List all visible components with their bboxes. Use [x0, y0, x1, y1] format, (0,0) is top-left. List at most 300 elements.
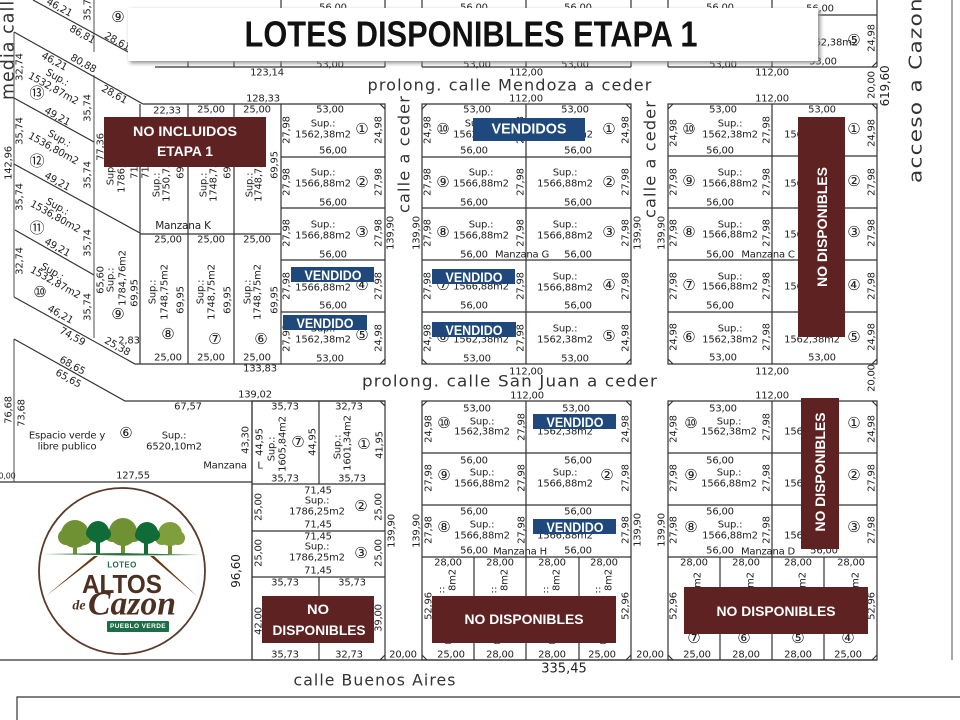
- diagonal lots 10 to 13: Sup.:: [46, 128, 72, 150]
- manzana H: ⑩: [437, 414, 451, 432]
- manzana H: ③: [600, 518, 614, 536]
- manzana K: 71,45: [140, 151, 152, 179]
- lots left of calle a ceder, top block: 56,00: [319, 300, 347, 312]
- manzana K: 69,95: [176, 286, 186, 314]
- manzana C: Manzana C: [741, 250, 795, 260]
- manzana K: ⑨: [111, 305, 125, 323]
- manzana G: 27,98: [516, 219, 526, 247]
- manzana H: ⑩: [441, 630, 455, 648]
- manzana G: ③: [602, 223, 616, 241]
- manzana H: 53,00: [562, 404, 590, 414]
- diagonal lots 10 to 13: ⑫: [29, 152, 45, 170]
- lots left of calle a ceder, top block: 53,00: [316, 60, 344, 70]
- manzana G: ⑧: [436, 223, 450, 241]
- logo: Altos de Cazon: ALTOS: [82, 569, 162, 599]
- manzana C: Sup.:: [718, 272, 742, 282]
- manzana G: ①: [602, 120, 616, 138]
- general dimensions: 20,00: [636, 650, 664, 660]
- manzana D: ④: [841, 629, 855, 647]
- manzana L: 25,00: [374, 493, 384, 521]
- manzana C: ⑩: [682, 120, 696, 138]
- label: vendido lot 3 manzana H: VENDIDO: [546, 519, 604, 535]
- manzana D: 27,98: [762, 464, 772, 492]
- manzana H: 56,00: [564, 506, 592, 518]
- manzana H: 24,98: [620, 415, 632, 443]
- manzana G: ②: [602, 173, 616, 191]
- manzana H: 53,00: [463, 404, 491, 414]
- manzana G: 27,98: [422, 272, 434, 300]
- general dimensions: 112,00: [510, 390, 544, 402]
- manzana G: 1566,88m2: [537, 282, 593, 294]
- manzana K: 25,00: [154, 234, 182, 246]
- manzana C: 56,00: [806, 4, 834, 14]
- manzana D: 28,00: [680, 558, 708, 568]
- manzana G: 1566,88m2: [453, 282, 509, 292]
- manzana H: ①: [600, 414, 614, 432]
- label: no incluidos etapa 1: [104, 117, 266, 167]
- manzana C: ⑥: [682, 328, 696, 346]
- label: vendido lot 4 left block: VENDIDO: [304, 267, 362, 283]
- manzana G: 56,00: [564, 300, 592, 312]
- manzana H: 56,00: [460, 546, 488, 556]
- label: no disponibles manzana L: NO: [307, 601, 329, 617]
- espacio verde: Sup.:: [162, 430, 186, 442]
- manzana G: 56,00: [564, 146, 592, 156]
- manzana K: Sup.:: [242, 280, 254, 304]
- diagonal lots 10 to 13: 32,74: [14, 53, 26, 81]
- manzana G: 27,98: [620, 168, 632, 196]
- general dimensions: 139,90: [656, 216, 668, 250]
- lots left of calle a ceder, top block: 27,98: [374, 272, 384, 300]
- manzana D: 25,00: [683, 650, 711, 660]
- manzana G: 27,98: [620, 272, 632, 300]
- manzana H: ⑦: [596, 630, 610, 648]
- manzana C: Sup.:: [718, 324, 742, 334]
- manzana D: m2: [746, 572, 756, 588]
- diagonal lots 10 to 13: 35,74: [82, 229, 94, 257]
- manzana K: Sup.:: [152, 173, 162, 197]
- general dimensions: 20,00: [866, 71, 878, 99]
- manzana C: Sup.:: [718, 168, 742, 178]
- manzana K: 69,95: [130, 279, 140, 307]
- manzana K: 25,00: [243, 352, 271, 364]
- manzana D: ②: [847, 466, 861, 484]
- manzana C: Sup.:: [718, 118, 742, 130]
- manzana G: 53,00: [561, 60, 589, 70]
- manzana G: 27,98: [620, 219, 632, 247]
- general dimensions: 128,33: [246, 94, 280, 104]
- manzana L: 1601,34m2: [342, 415, 354, 471]
- manzana K: 2,83: [118, 336, 140, 346]
- manzana C: 1562,38m2: [784, 334, 840, 346]
- manzana K: 1750,75m2: [162, 146, 172, 202]
- manzana H: 28,00: [486, 650, 514, 660]
- diagonal lots 10 to 13: 1536,80m2: [26, 131, 80, 167]
- manzana L: 35,73: [271, 402, 299, 412]
- manzana K: 1748,75m2: [254, 146, 264, 202]
- manzana D: 53,00: [709, 404, 737, 414]
- manzana D: ⑦: [687, 629, 701, 647]
- manzana C: 1566,88m2: [702, 178, 758, 190]
- espacio verde: 127,55: [116, 470, 150, 482]
- espacio verde: 73,68: [16, 399, 28, 427]
- manzana C: Sup.:: [718, 220, 742, 230]
- manzana H: 8m2: [604, 569, 614, 591]
- manzana L: 35,73: [271, 578, 299, 588]
- manzana D: ⑧: [684, 518, 698, 536]
- manzana C: 27,98: [762, 219, 772, 247]
- manzana G: 1562,38m2: [537, 334, 593, 346]
- manzana D: Sup.:: [717, 416, 741, 428]
- manzana C: 24,98: [866, 119, 878, 147]
- manzana D: 28,00: [732, 650, 760, 660]
- manzana H: 8m2: [552, 569, 562, 591]
- manzana C: 24,98: [866, 24, 878, 52]
- manzana C: 27,98: [762, 323, 772, 351]
- title: LOTES DISPONIBLES ETAPA 1: [244, 14, 698, 54]
- label: no incluidos etapa 1: NO INCLUIDOS: [133, 123, 237, 139]
- manzana K: 69,95: [270, 286, 280, 314]
- manzana K: ⑧: [161, 325, 175, 343]
- manzana G: 1562,38m2: [537, 130, 593, 140]
- icon: trees: [58, 518, 185, 554]
- manzana K: 25,00: [197, 234, 225, 246]
- manzana H: Manzana H: [493, 546, 547, 558]
- lots left of calle a ceder, top block: 53,00: [316, 104, 344, 116]
- manzana L: ①: [357, 435, 371, 453]
- manzana G: 24,98: [422, 324, 434, 352]
- manzana K: 1786,25m2: [116, 137, 128, 193]
- lots left of calle a ceder, top block: 27,98: [374, 168, 384, 196]
- manzana K: 25,00: [154, 352, 182, 364]
- manzana C: 53,00: [808, 104, 836, 116]
- manzana K: 65,60: [96, 266, 106, 294]
- manzana G: ⑥: [436, 328, 450, 346]
- diagonal lots 10 to 13: 142,96: [4, 146, 14, 180]
- diagonal lots 10 to 13: 35,74: [82, 293, 94, 321]
- manzana L: 25,00: [254, 539, 264, 567]
- manzana G: ⑨: [436, 173, 450, 191]
- diagonal lots 10 to 13: 49,21: [42, 236, 72, 260]
- manzana H: 1566,88m2: [537, 478, 593, 490]
- manzana H: 1562,38m2: [537, 426, 593, 438]
- manzana H: ⑧: [545, 630, 559, 648]
- manzana G: 24,98: [422, 116, 434, 144]
- icon: ground and road: [43, 553, 201, 597]
- lots left of calle a ceder, top block: 24,98: [374, 324, 384, 352]
- manzana C: 24,98: [668, 119, 680, 147]
- diagonal lots 10 to 13: 32,74: [14, 247, 26, 275]
- manzana G: 27,98: [422, 168, 434, 196]
- manzana K: 69,95: [222, 286, 234, 314]
- manzana D: 25,00: [834, 650, 862, 660]
- label: vendidos manzana G: [473, 118, 585, 141]
- diagonal lots 10 to 13: ⑬: [29, 84, 45, 102]
- manzana H: 28,00: [486, 558, 514, 568]
- manzana H: 27,98: [516, 516, 528, 544]
- manzana H: ⑨: [490, 630, 504, 648]
- label: no disponibles manzana C: NO DISPONIBLES: [814, 167, 830, 287]
- manzana C: 1562,38m2: [702, 334, 758, 346]
- lots left of calle a ceder, top block: 1566,88m2: [295, 178, 351, 190]
- manzana L: 35,73: [338, 474, 366, 484]
- manzana L: 71,45: [304, 520, 332, 530]
- lots left of calle a ceder, top block: 27,98: [282, 116, 292, 144]
- manzana H: 27,98: [516, 413, 528, 441]
- manzana L: 39,00: [374, 604, 384, 632]
- general dimensions: 20,00: [389, 650, 417, 660]
- manzana C: 56,00: [706, 2, 734, 14]
- general dimensions: 133,83: [243, 364, 277, 374]
- diagonal lots 10 to 13: 86,81: [67, 23, 97, 47]
- manzana D: 28,00: [784, 650, 812, 660]
- manzana H: Sup.:: [553, 520, 577, 530]
- manzana H: 28,00: [590, 558, 618, 568]
- label: no disponibles manzana L: [262, 596, 374, 643]
- manzana K: 1748,75m2: [252, 264, 264, 320]
- manzana H: 8m2: [448, 569, 458, 591]
- manzana D: 56,00: [706, 456, 734, 466]
- lots left of calle a ceder, top block: 1566,88m2: [295, 282, 351, 294]
- label: no disponibles manzana H: [432, 596, 616, 643]
- manzana K: Sup.:: [148, 280, 158, 304]
- manzana C: 56,00: [706, 198, 734, 208]
- manzana G: 56,00: [564, 2, 592, 14]
- manzana D: 27,98: [668, 464, 680, 492]
- manzana C: 1566,88m2: [702, 230, 758, 240]
- diagonal lots 10 to 13: 35,74: [14, 117, 26, 145]
- manzana K: Sup.:: [106, 161, 116, 185]
- manzana G: ⑤: [602, 327, 616, 345]
- manzana C: 24,98: [668, 323, 680, 351]
- manzana H: ②: [600, 466, 614, 484]
- general dimensions: 335,45: [541, 662, 587, 676]
- diagonal lots 10 to 13: Sup.:: [39, 261, 65, 283]
- manzana H: 1566,88m2: [537, 530, 593, 542]
- manzana G: 24,98: [620, 116, 632, 144]
- manzana C: 56,00: [706, 250, 734, 260]
- lots left of calle a ceder, top block: 1562,38m2: [295, 334, 351, 346]
- manzana D: Manzana D: [741, 546, 796, 558]
- lots left of calle a ceder, top block: Sup.:: [311, 168, 335, 178]
- general dimensions: 139,90: [632, 216, 644, 250]
- manzana H: Sup.:: [553, 416, 577, 428]
- manzana G: 56,00: [460, 146, 488, 156]
- manzana H: 27,98: [620, 516, 632, 544]
- manzana G: Sup.:: [469, 168, 493, 178]
- manzana L: 35,73: [338, 578, 366, 588]
- manzana C: ⑨: [682, 172, 696, 190]
- label: vendido lot 5 left block: VENDIDO: [296, 315, 354, 331]
- espacio verde: 76,68: [4, 396, 14, 424]
- manzana L: 1605,84m2: [278, 416, 288, 472]
- manzana H: 56,00: [460, 506, 488, 518]
- manzana D: 1562,38m2: [701, 426, 757, 438]
- manzana L: Sup.:: [332, 435, 344, 459]
- general dimensions: 139,90: [386, 216, 396, 250]
- manzana D: [668, 401, 878, 660]
- manzana K: 1748,75m2: [160, 264, 170, 320]
- manzana D: m2: [692, 572, 704, 588]
- manzana G: 1566,88m2: [453, 178, 509, 190]
- manzana D: ③: [847, 518, 861, 536]
- manzana C: ⑦: [682, 276, 696, 294]
- manzana K: 71,45: [130, 151, 140, 179]
- logo: Altos de Cazon: de: [72, 598, 86, 614]
- diagonal lots 10 to 13: 46,21: [39, 50, 69, 74]
- manzana C: 27,98: [866, 219, 878, 247]
- manzana G: 56,00: [460, 2, 488, 14]
- general dimensions: 139,02: [238, 390, 272, 400]
- diagonal lots 10 to 13: 49,21: [42, 105, 72, 129]
- manzana H: ::: [595, 584, 601, 596]
- manzana H: ::: [491, 584, 497, 596]
- manzana D: 28,00: [837, 558, 865, 568]
- manzana D: 27,98: [668, 516, 680, 544]
- manzana H: 1566,88m2: [454, 530, 510, 542]
- manzana G: 1562,38m2: [453, 130, 509, 140]
- manzana K: 69,95: [270, 151, 280, 179]
- manzana H: ::: [439, 584, 445, 596]
- lots left of calle a ceder, top block: [281, 0, 385, 364]
- manzana C: 1566,88m2: [784, 230, 840, 240]
- manzana H: [422, 401, 632, 660]
- manzana G: [422, 0, 632, 364]
- general dimensions: 619,60: [878, 66, 892, 106]
- manzana C: 27,98: [668, 272, 680, 300]
- manzana C: 27,98: [762, 168, 772, 196]
- lots left of calle a ceder, top block: 27,98: [374, 219, 384, 247]
- general dimensions: 112,00: [509, 366, 543, 378]
- espacio verde: 6520,10m2: [146, 442, 202, 452]
- general dimensions: 139,90: [412, 514, 422, 548]
- espacio verde: L: [257, 460, 263, 472]
- espacio verde: 43,30: [240, 426, 252, 454]
- general dimensions: 112,00: [755, 390, 789, 402]
- label: no disponibles manzana D column: NO DISPONIBLES: [812, 412, 828, 532]
- manzana L: Sup.:: [266, 437, 278, 461]
- manzana D: 1566,88m2: [702, 530, 758, 542]
- lots left of calle a ceder, top block: 56,00: [319, 2, 347, 14]
- manzana D: 27,98: [866, 516, 878, 544]
- diagonal lots 10 to 13: 80,88: [68, 52, 98, 76]
- label: vendido lot 1 manzana H: VENDIDO: [546, 414, 604, 430]
- general dimensions: 112,00: [755, 366, 789, 378]
- general dimensions: 20,00: [866, 364, 878, 392]
- manzana G: ④: [602, 276, 616, 294]
- manzana H: 25,00: [588, 650, 616, 660]
- manzana D: 56,00: [706, 546, 734, 556]
- diagonal lots 10 to 13: 49,21: [42, 170, 72, 194]
- manzana H: ⑨: [437, 466, 451, 484]
- manzana D: 28,00: [784, 558, 812, 568]
- manzana G: 27,98: [516, 272, 526, 300]
- street names: calle Buenos Aires: [294, 670, 456, 690]
- manzana K: 22,33: [153, 106, 181, 116]
- manzana C: 1566,88m2: [784, 282, 840, 292]
- general dimensions: 139,90: [656, 513, 668, 547]
- lots left of calle a ceder, top block: 27,98: [282, 168, 292, 196]
- diagonal lots 10 to 13: 77,36: [96, 133, 106, 161]
- lots left of calle a ceder, top block: 24,98: [374, 116, 384, 144]
- manzana G: 53,00: [561, 104, 589, 116]
- label: vendido lot 7 manzana G: VENDIDO: [446, 269, 503, 285]
- manzana L: 25,00: [374, 539, 384, 567]
- manzana K: 25,00: [243, 234, 271, 246]
- manzana D: ⑨: [684, 466, 698, 484]
- manzana G: 1562,38m2: [453, 334, 509, 346]
- manzana G: ⑦: [436, 276, 450, 294]
- manzana H: 28,00: [538, 650, 566, 660]
- manzana L: 1786,25m2: [289, 506, 345, 518]
- lots left of calle a ceder, top block: ②: [355, 173, 369, 191]
- diagonal lots 10 to 13: 28,61: [102, 30, 132, 54]
- street names: prolong. calle Mendoza a ceder: [368, 76, 652, 94]
- label: no disponibles manzana D column: [801, 398, 839, 549]
- manzana D: 27,98: [866, 464, 878, 492]
- manzana H: 24,98: [424, 415, 434, 443]
- manzana G: 1566,88m2: [537, 178, 593, 190]
- manzana L: 35,73: [271, 474, 299, 484]
- manzana H: 56,00: [564, 456, 592, 466]
- manzana D: m2: [798, 572, 808, 588]
- title: [128, 8, 818, 61]
- general dimensions: 112,00: [755, 68, 789, 78]
- logo: Altos de Cazon: Cazon: [88, 586, 176, 622]
- manzana H: Sup.:: [470, 468, 494, 478]
- manzana C: ①: [847, 120, 861, 138]
- espacio verde: libre publico: [38, 442, 96, 452]
- manzana H: 27,98: [516, 464, 528, 492]
- street names: prolong. calle San Juan a ceder: [362, 372, 658, 390]
- logo: Altos de Cazon: PUEBLO VERDE: [110, 623, 166, 630]
- lots left of calle a ceder, top block: 27,98: [282, 272, 292, 300]
- manzana C: 27,98: [668, 219, 680, 247]
- manzana D: 28,00: [732, 558, 760, 568]
- manzana K: Manzana K: [155, 220, 212, 232]
- logo: Altos de Cazon: LOTEO: [107, 560, 137, 570]
- label: no disponibles manzana C: [798, 117, 845, 337]
- lots left of calle a ceder, top block: 56,00: [319, 198, 347, 208]
- diagonal lots 10 to 13: ⑩: [33, 283, 47, 301]
- manzana H: ⑧: [437, 518, 451, 536]
- general dimensions: 112,00: [509, 94, 543, 104]
- manzana C: 1566,88m2: [702, 282, 758, 292]
- manzana H: Sup.:: [470, 520, 494, 530]
- manzana H: 52,96: [620, 592, 632, 620]
- manzana D: 56,00: [706, 506, 734, 518]
- espacio verde: Espacio verde y: [29, 430, 105, 442]
- manzana K: ⑥: [254, 330, 268, 348]
- manzana G: 56,00: [460, 198, 488, 208]
- label: no disponibles manzana D row: NO DISPONIBLES: [716, 603, 836, 619]
- manzana G: Sup.:: [553, 168, 577, 178]
- street names: calle a ceder: [640, 100, 660, 218]
- diagonal lots 10 to 13: Sup.:: [44, 67, 70, 89]
- general dimensions: [229, 66, 892, 676]
- manzana G: Sup.:: [553, 324, 577, 334]
- manzana K: 25,38: [102, 335, 132, 359]
- manzana L: ⑦: [291, 433, 305, 451]
- manzana L: 25,00: [254, 493, 264, 521]
- manzana G: Sup.:: [465, 118, 489, 130]
- manzana G: 27,98: [516, 324, 526, 352]
- espacio verde: ⑥: [119, 424, 133, 442]
- manzana C: ②: [847, 172, 861, 190]
- manzana C: 53,00: [709, 104, 737, 116]
- diagonal lots 10 to 13: 35,74: [82, 161, 94, 189]
- manzana D: Sup.:: [717, 468, 741, 478]
